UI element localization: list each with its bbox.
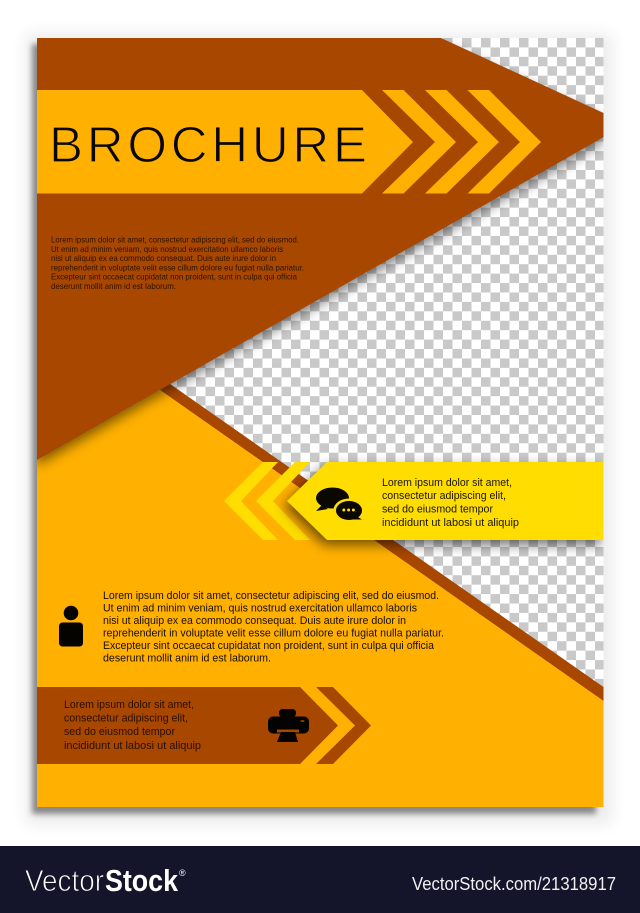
text block: middle paragraph: nisi ut aliquip ex ea commodo consequat. Duis aute irure dolor in	[103, 615, 406, 627]
text block: callout: Lorem ipsum dolor sit amet,	[382, 477, 512, 489]
logo: Vector	[25, 863, 104, 898]
text block: bottom band: incididunt ut labosi ut aliquip	[64, 740, 201, 752]
orange lower panel	[37, 390, 604, 807]
text block: top paragraph: Ut enim ad minim veniam, quis nostrud exercitation ullamco laboris	[51, 244, 283, 254]
callout shadow	[284, 467, 600, 545]
text block: bottom band: sed do eiusmod tempor	[64, 726, 175, 738]
text block: top paragraph: deserunt mollit anim id est laborum.	[51, 281, 176, 291]
text block: callout	[382, 477, 519, 529]
text block: middle paragraph: reprehenderit in voluptate velit esse cillum dolore eu fugiat nulla pariatur.	[103, 628, 444, 640]
text block: middle paragraph: deserunt mollit anim id est laborum.	[103, 652, 271, 664]
brown arrow shape	[37, 38, 604, 460]
panel: transparent checkerboard background	[37, 38, 604, 807]
panel: footer bar	[0, 846, 640, 913]
text block: top paragraph: reprehenderit in voluptate velit esse cillum dolore eu fugiat nulla pariatur.	[51, 262, 304, 272]
brown arrow band	[37, 687, 338, 764]
text block: top paragraph	[51, 234, 304, 291]
callout banner	[287, 462, 604, 540]
text block: middle paragraph: Lorem ipsum dolor sit amet, consectetur adipiscing elit, sed do eiusmod.	[103, 590, 439, 602]
page drop shadow	[26, 34, 612, 824]
icon: speech bubbles	[316, 488, 364, 522]
text block: callout: sed do eiusmod tempor	[382, 504, 493, 516]
image id url: VectorStock.com/21318917	[412, 874, 616, 894]
panel: yellow callout	[224, 462, 604, 545]
text block: top paragraph: nisi ut aliquip ex ea commodo consequat. Duis aute irure dolor in	[51, 253, 276, 263]
logo: Stock	[105, 863, 179, 898]
title chevrons	[382, 90, 541, 194]
text block: bottom band	[64, 699, 201, 752]
text block: bottom band: Lorem ipsum dolor sit amet,	[64, 699, 194, 711]
panel: lower section	[37, 370, 604, 807]
top arrow shadow	[36, 44, 602, 466]
panel: top brown arrow	[36, 38, 604, 466]
text block: bottom band: consectetur adipiscing elit,	[64, 712, 188, 724]
text block: middle paragraph	[103, 590, 444, 664]
logo: ®	[179, 868, 186, 878]
text block: top paragraph: Excepteur sint occaecat cupidatat non proident, sunt in culpa qui officia	[51, 272, 297, 282]
text block: callout: incididunt ut labosi ut aliquip	[382, 517, 519, 529]
brown diagonal strip	[150, 370, 604, 701]
logo	[25, 863, 186, 898]
text block: middle paragraph: Ut enim ad minim veniam, quis nostrud exercitation ullamco laboris	[103, 602, 417, 614]
callout chevrons	[224, 462, 310, 540]
icon: printer	[268, 709, 309, 742]
text block: top paragraph: Lorem ipsum dolor sit amet, consectetur adipiscing elit, sed do eiusmod.	[51, 234, 299, 244]
title: BROCHURE	[49, 116, 367, 173]
text block: callout: consectetur adipiscing elit,	[382, 490, 506, 502]
panel: bottom brown band	[37, 687, 371, 764]
orange title band	[37, 90, 413, 194]
icon: person	[59, 606, 83, 646]
brown chevron	[316, 687, 371, 764]
text block: middle paragraph: Excepteur sint occaecat cupidatat non proident, sunt in culpa qui officia	[103, 640, 435, 652]
